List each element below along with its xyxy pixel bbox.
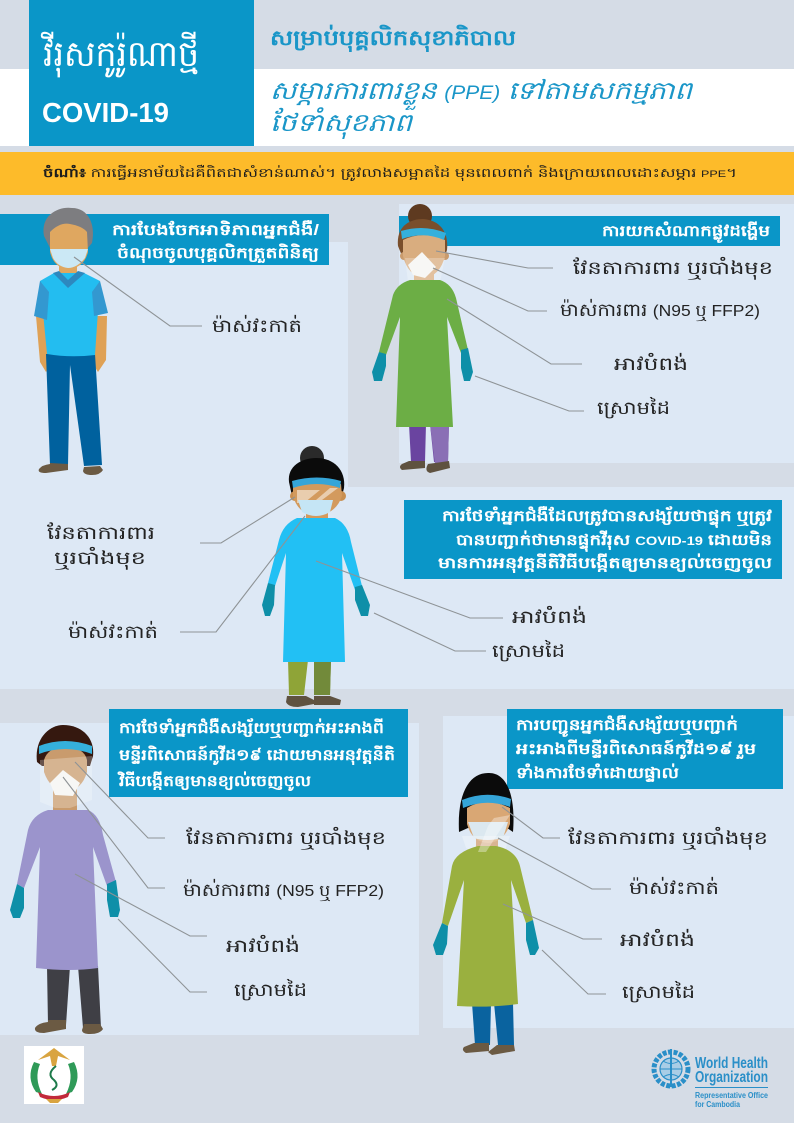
logo: World Health Organization [654,1049,768,1109]
label: face shield two lines [47,522,155,570]
label: gloves: ស្រោមដៃ [492,639,565,662]
panel: patient transport [443,709,794,1028]
heading: PPE by activity: ថែទាំសុខភាព [270,107,414,139]
label: gloves: ស្រោមដៃ [234,978,307,1001]
note banner: ចំណាំ៖ ការធ្វើអនាម័យដៃគឺពិតជាសំខាន់ណាស់។ ត្រូវលាងសម្អាតដៃ មុនពេលពាក់ និងក្រោយពេលដោះសម្ភារ PPE ។ [43,164,737,181]
label: face shield: វែនតាការពារ ឬរបាំងមុខ [568,826,768,850]
logo: World Health Organization: Organization [695,1069,768,1086]
logo: ministry of health [24,1046,84,1104]
label: face shield two lines: វែនតាការពារ [47,522,155,543]
subtitle: for health workers: សម្រាប់បុគ្គលិកសុខាភិបាល [270,24,516,53]
leader: triage mask [74,257,202,326]
figure: aerosol care worker in purple gown [10,725,120,1034]
label: gloves: ស្រោមដៃ [622,980,695,1003]
heading: PPE by activity [270,77,694,139]
leader: aerosol mask [63,777,165,888]
figure: triage worker [34,208,108,475]
label: respirator: ម៉ាស់ការពារ (N95 ឬ FFP2) [560,298,760,322]
label: gown: អាវបំពង់ [512,605,587,627]
leader: sampling gloves [475,376,584,411]
sampling heading [399,216,780,246]
label: surgical mask: ម៉ាស់វះកាត់ [212,314,302,336]
title block [29,0,254,146]
leader: care mask [180,516,305,632]
leader: transport gloves [542,950,606,994]
transport heading: ទាំងការថែទាំដោយផ្ទាល់ [516,763,679,782]
WHO emblem [654,1049,688,1087]
label: surgical mask: ម៉ាស់វះកាត់ [68,620,158,642]
title block: COVID-19 [42,97,169,128]
sampling heading: ការយកសំណាកផ្លូវដង្ហើម [602,221,771,243]
figure: transport worker in green gown [433,773,539,1055]
triage heading: ការបែងចែកអាទិភាពអ្នកជំងឺ/ [112,220,320,239]
heading: PPE by activity: សម្ភារការពារខ្លួន (PPE) ទៅតាមសកម្មភាព [270,77,694,110]
leader: sampling mask [433,268,547,311]
leader: transport gown [503,904,602,939]
logo: World Health Organization: World Health [695,1055,768,1072]
panel: care without aerosol procedures [0,487,794,689]
logo: World Health Organization: Representative Office [695,1091,768,1100]
leader: aerosol gloves [118,919,207,992]
figure: care worker in blue gown [262,446,370,707]
label: face shield: វែនតាការពារ ឬរបាំងមុខ [186,826,386,850]
label: gown: អាវបំពង់ [620,928,695,950]
panel: triage [0,214,348,492]
label: gown: អាវបំពង់ [226,934,300,956]
aerosol care heading: វិធីបង្កើតឲ្យមានខ្យល់ចេញចូល [116,771,311,792]
leader: sampling gown [447,299,582,364]
care heading [404,500,782,579]
leader: sampling shield [436,251,553,268]
title block: វីរុសកូរ៉ូណាថ្មី [41,31,199,78]
panel: respiratory sampling [399,204,794,463]
care heading: ការថែទាំអ្នកជំងឺដែលត្រូវបានសង្ស័យថាផ្ទុក ឬត្រូវ [442,506,772,528]
leader: transport mask [498,838,611,889]
label: face shield: វែនតាការពារ ឬរបាំងមុខ [573,256,773,280]
leader: care gloves [374,613,486,651]
white title band [0,69,794,146]
label: gown: អាវបំពង់ [614,352,688,374]
logo: World Health Organization: for Cambodia [695,1100,740,1109]
label: surgical mask: ម៉ាស់វះកាត់ [629,876,719,898]
triage heading: ចំណុចចូលបុគ្គលិកត្រួតពិនិត្យ [117,243,319,264]
label: gloves: ស្រោមដៃ [597,396,670,419]
note banner [0,152,794,195]
care heading: មានការអនុវត្តនីតិវិធីបង្កើតឲ្យមានខ្យល់ចេញចូល [438,553,772,574]
transport heading: ការបញ្ជូនអ្នកជំងឺសង្ស័យឬបញ្ជាក់ [516,715,738,737]
leader: transport shield [502,807,560,838]
aerosol care heading [109,709,408,797]
transport heading: អះអាងពីមន្ទីរពិសោធន៍កូវីដ១៩ រួម [516,739,757,760]
care heading: បានបញ្ជាក់ថាមានផ្ទុកវីរុស COVID-19 ដោយមិន [456,530,772,552]
label: respirator: ម៉ាស់ការពារ (N95 ឬ FFP2) [183,878,384,902]
transport heading [507,709,783,789]
leader: aerosol shield [75,762,165,838]
leader: aerosol gown [75,874,207,936]
figure: sampling worker [372,204,473,473]
aerosol care heading: មន្ទីរពិសោធន៍កូវីដ១៩ ដោយមានអនុវត្តនីតិ [119,745,395,766]
label: face shield two lines: ឬរបាំងមុខ [54,546,146,570]
triage heading [0,214,329,265]
leader: care shield [200,497,295,543]
leader: care gown [316,561,503,618]
panel: care with aerosol procedures [0,709,419,1035]
aerosol care heading: ការថែទាំអ្នកជំងឺសង្ស័យឬបញ្ជាក់អះអាងពី [119,718,384,739]
